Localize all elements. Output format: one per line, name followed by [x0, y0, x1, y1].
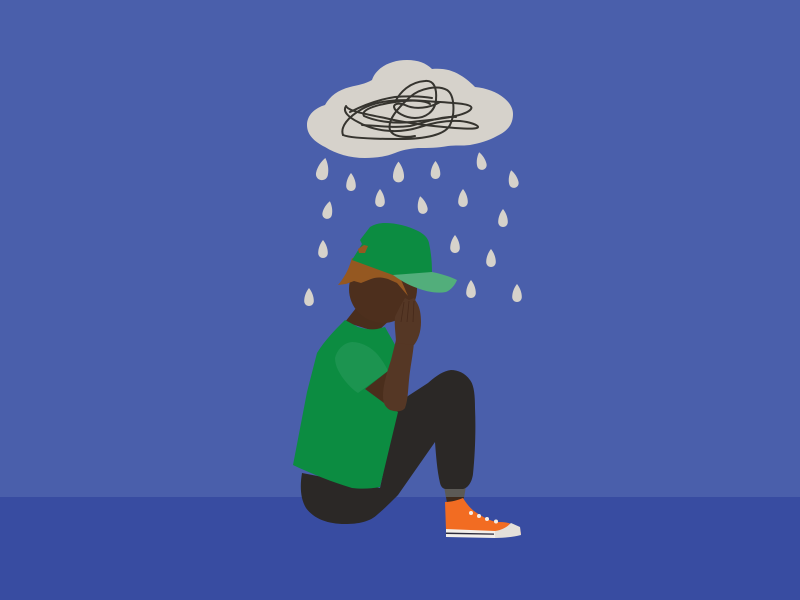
cap	[352, 223, 457, 293]
sock	[444, 486, 466, 498]
upper arm	[365, 371, 392, 408]
seated person	[293, 223, 521, 538]
sole stripe	[446, 532, 494, 535]
shirt	[293, 320, 398, 489]
cloud with scribble	[307, 60, 513, 158]
shoe toe cap	[495, 523, 521, 538]
cap notch	[358, 245, 368, 253]
neck	[345, 303, 392, 332]
scribble	[342, 81, 478, 139]
cap crown	[352, 223, 432, 275]
forearm	[383, 340, 414, 411]
shoe upper	[445, 498, 521, 534]
hand	[395, 298, 421, 345]
ankle	[446, 497, 464, 503]
finger lines	[401, 301, 414, 322]
trousers	[301, 370, 475, 524]
head	[349, 255, 417, 323]
palm and fingers	[395, 298, 421, 345]
shoe sole	[446, 529, 495, 538]
eyelets	[469, 511, 498, 524]
cloud shape	[307, 60, 513, 158]
floor	[0, 497, 800, 600]
sleeve	[335, 342, 388, 393]
hair	[338, 258, 408, 296]
rain drops	[304, 151, 522, 306]
shoe	[445, 498, 521, 538]
cap visor	[393, 272, 457, 293]
